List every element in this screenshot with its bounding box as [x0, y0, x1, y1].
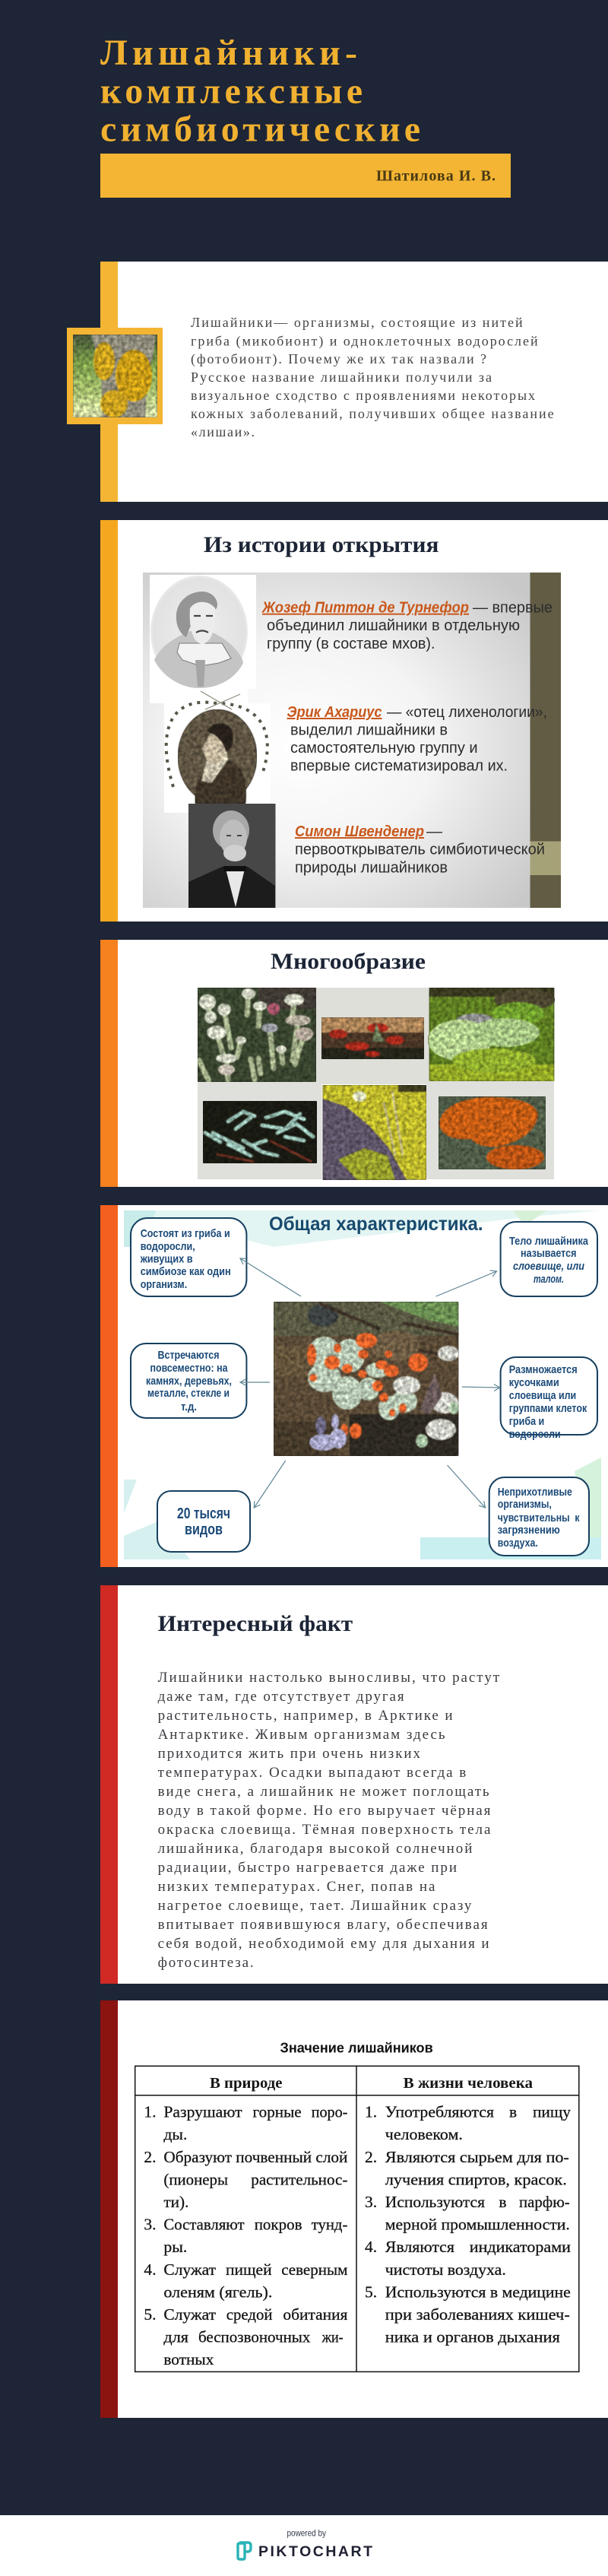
text: Schwendener: — — [426, 823, 442, 840]
column: in nature: жи- — [321, 2328, 344, 2346]
column: in nature: обитания — [283, 2305, 348, 2324]
column: in nature: Образуют почвенный слой — [163, 2148, 347, 2166]
table caption: Значение лишайников — [280, 2041, 433, 2056]
column: in nature: Служат — [163, 2260, 217, 2279]
decorative slide background — [124, 1210, 601, 1559]
callout: composition: организм. — [141, 1278, 187, 1291]
heading: history: Из истории открытия — [204, 532, 439, 557]
callout: reproduction: гриба и — [509, 1415, 544, 1428]
column: in human life: Являются сырьем для по- — [385, 2148, 569, 2166]
column: in nature: (пионеры — [163, 2170, 228, 2188]
title: комплексные — [100, 71, 363, 111]
text: Acharius: — «отец лихенологии», — [387, 704, 547, 721]
photo: cup lichens — [198, 988, 316, 1082]
column: in nature: средой — [226, 2305, 272, 2324]
callout: sensitivity: организмы, — [498, 1498, 552, 1511]
column: in nature: 3. — [144, 2216, 157, 2234]
title: симбиотические — [100, 109, 420, 150]
text: Schwendener — [295, 823, 545, 876]
footer — [0, 2515, 608, 2576]
column: in nature: Составляют — [163, 2216, 245, 2234]
column: in nature: для — [163, 2328, 188, 2346]
powered by label: powered by — [287, 2528, 326, 2539]
column: in nature: покров — [255, 2216, 302, 2234]
photo: orange crust lichen — [426, 1081, 554, 1179]
panel: general characteristics — [100, 1205, 608, 1567]
column: in human life: 5. — [365, 2283, 377, 2301]
column: in human life: пищу — [533, 2103, 571, 2121]
column: in nature: тунд- — [312, 2216, 347, 2234]
photo: red-capped lichens — [316, 988, 429, 1084]
callout: thallus: талом. — [534, 1273, 564, 1286]
author banner: Шатилова И. В. — [376, 168, 496, 185]
column: in human life: при заболеваниях кишеч- — [385, 2305, 570, 2324]
text block: fact: фотосинтеза. — [158, 1955, 254, 1971]
text: Tournefort: — впервые — [473, 600, 553, 617]
callout: habitat: т.д. — [181, 1401, 197, 1413]
column: in nature: беспозвоночных — [198, 2328, 311, 2346]
text block: fact: Антарктике. Живым организмам здесь — [158, 1727, 445, 1743]
text block: definition: визуальное сходство с проявлениями некоторых — [191, 388, 535, 403]
callout: sensitivity: чувствительны к — [498, 1512, 580, 1524]
column: in human life: мерной промышленности. — [385, 2216, 570, 2234]
text block: fact: низких температурах. Снег, попав на — [158, 1879, 435, 1895]
text block: fact — [158, 1670, 500, 1971]
column: in nature: Разрушают — [163, 2103, 242, 2121]
callout: thallus: слоевище, или — [513, 1260, 584, 1273]
callout: reproduction: кусочками — [509, 1376, 559, 1389]
text: Schwendener: Симон Швенденер — [295, 823, 424, 840]
callout: sensitivity: загрязнению — [498, 1524, 560, 1537]
column: in human life: Являются — [385, 2238, 454, 2256]
column: in human life: индикаторами — [470, 2238, 571, 2256]
text block: definition: «лишаи». — [191, 424, 255, 439]
text block: fact: приходится жить при очень низких — [158, 1746, 421, 1762]
callout: composition: симбиозе как один — [141, 1265, 231, 1278]
column: in nature: пищей — [226, 2260, 272, 2279]
portrait: Tournefort — [150, 575, 256, 703]
column: in human life: Используются в медицине — [385, 2283, 571, 2301]
text block: fact: виде снега, а лишайник не может поглощать — [158, 1784, 489, 1800]
text block: fact: нагретое слоевище, тает. Лишайник сразу — [158, 1898, 472, 1914]
column: in human life: в — [509, 2103, 517, 2121]
column: in human life — [365, 2103, 571, 2346]
callout: habitat: Встречаются — [158, 1349, 219, 1362]
panel: interesting fact — [100, 1585, 608, 1984]
photo grid — [198, 988, 555, 1180]
callout: sensitivity: воздуха. — [498, 1537, 538, 1550]
column: in nature: 2. — [144, 2148, 157, 2166]
text block: definition: (фотобионт). Почему же их так назвали ? — [191, 351, 486, 367]
column: in nature: поро- — [312, 2103, 347, 2121]
column: in nature: 4. — [144, 2260, 157, 2279]
callout: reproduction — [501, 1357, 597, 1441]
text: Tournefort: Жозеф Питтон де Турнефор — [261, 600, 469, 617]
callout: composition: водоросли, — [141, 1240, 195, 1253]
title: Лишайники- — [100, 33, 357, 73]
text block: fact: Лишайники настолько выносливы, что растут — [158, 1670, 500, 1686]
callout: reproduction: Размножается — [509, 1363, 578, 1376]
photo: reindeer lichen — [198, 1082, 322, 1179]
text: Acharius: выделил лишайники в — [290, 722, 448, 738]
text: Acharius: впервые систематизировал их. — [290, 758, 508, 775]
text block: fact: лишайника, благодаря высокой солнечной — [158, 1841, 472, 1857]
portrait: Schwendener — [188, 804, 275, 908]
heading: interesting fact: Интересный факт — [158, 1611, 353, 1636]
column: in human life: 4. — [365, 2238, 377, 2256]
callout: habitat: камнях, деревьях, — [146, 1375, 232, 1388]
table — [135, 2066, 579, 2371]
callout: composition — [131, 1218, 246, 1296]
column: in nature: ды. — [163, 2125, 187, 2143]
column: in nature: оленям (ягель). — [163, 2283, 272, 2301]
slide image: scientists — [143, 573, 561, 908]
arrows — [240, 1258, 500, 1508]
column: in human life: чистоты воздуха. — [385, 2260, 506, 2279]
column: in human life: Употребляются — [385, 2103, 494, 2121]
column: in human life: Используются — [385, 2193, 485, 2211]
icon: lichen on tree photo — [67, 328, 163, 424]
column: in human life: 1. — [365, 2103, 377, 2121]
column: in human life: парфю- — [519, 2193, 570, 2211]
portrait: Acharius — [164, 691, 271, 813]
text block: definition: Русское название лишайники получили за — [191, 370, 492, 385]
callout: habitat: повсеместно: на — [150, 1362, 228, 1375]
column: in nature: северным — [281, 2260, 348, 2279]
text: Schwendener: природы лишайников — [295, 859, 448, 876]
heading: diversity: Многообразие — [271, 949, 426, 974]
text block: definition: Лишайники— организмы, состоящие из нитей — [191, 315, 523, 330]
column: in nature: вотных — [163, 2350, 214, 2368]
callout: species count: видов — [185, 1521, 223, 1538]
callout: reproduction: слоевища или — [509, 1389, 576, 1402]
callout: thallus — [501, 1222, 597, 1296]
text block: fact: впитывает появившуюся влагу, обеспечивая — [158, 1917, 488, 1933]
column: in nature: 1. — [144, 2103, 157, 2121]
text block: fact: даже там, где отсутствует другая — [158, 1689, 404, 1705]
text block: fact: себя водой, необходимой ему для дыхания и — [158, 1936, 489, 1952]
column headers: В природе — [210, 2075, 283, 2092]
column: in nature — [144, 2103, 348, 2368]
column: in human life: ника и органов дыхания — [385, 2328, 560, 2346]
column headers: В жизни человека — [404, 2075, 533, 2092]
text block: fact: окраска слоевища. Тёмная поверхность тела — [158, 1822, 491, 1838]
photo: moss and purple lichen — [322, 1085, 426, 1180]
callout: reproduction: группами клеток — [509, 1402, 587, 1415]
column: in human life: в — [499, 2193, 507, 2211]
column: in human life: человеком. — [385, 2125, 463, 2143]
column: in nature: 5. — [144, 2305, 157, 2324]
column headers — [210, 2075, 533, 2092]
callout: composition: живущих в — [140, 1253, 193, 1266]
text: Acharius: самостоятельную группу и — [290, 740, 478, 757]
panel: significance of lichens — [100, 2000, 608, 2418]
title — [100, 33, 420, 150]
text block: definition — [191, 315, 554, 439]
panel: history — [100, 520, 608, 922]
column: in nature: Служат — [163, 2305, 217, 2324]
author banner — [100, 154, 511, 198]
text: Tournefort: группу (в составе мхов). — [267, 636, 435, 652]
callout: sensitivity: Неприхотливые — [498, 1486, 572, 1499]
column: in nature: ры. — [163, 2238, 187, 2256]
callout: reproduction: водоросли — [509, 1428, 561, 1441]
text: Tournefort — [261, 600, 553, 652]
callout: species count — [157, 1491, 250, 1552]
callout: thallus: Тело лишайника — [509, 1235, 589, 1248]
text block: fact: растительность, например, в Арктике и — [158, 1708, 453, 1724]
text block: definition: кожных заболеваний, получивших общее название — [191, 406, 554, 421]
text block: fact: радиации, быстро нагревается даже при — [158, 1860, 457, 1876]
callout: composition: Состоят из гриба и — [141, 1227, 230, 1240]
text: Acharius — [287, 704, 547, 775]
icon: piktochart logo — [238, 2543, 251, 2559]
text block: fact: воду в такой форме. Но его выручает чёрная — [158, 1803, 491, 1819]
column: in human life: лучения спиртов, красок. — [385, 2170, 567, 2188]
text: Tournefort: объединил лишайники в отдельную — [267, 617, 520, 634]
callout: thallus: называется — [521, 1247, 576, 1260]
panel: diversity — [100, 940, 608, 1187]
column: in nature: ти). — [163, 2193, 188, 2211]
photo: green lichen — [428, 988, 555, 1081]
callout: sensitivity — [489, 1477, 589, 1556]
column: in human life: 3. — [365, 2193, 377, 2211]
panel: definition — [67, 262, 608, 502]
central lichen photo — [274, 1302, 459, 1456]
column: in nature: горные — [252, 2103, 302, 2121]
callout: habitat — [131, 1344, 246, 1418]
text block: fact: температурах. Осадки выпадают всегда в — [158, 1765, 466, 1781]
logo wordmark: PIKTOCHART — [258, 2543, 372, 2560]
column: in human life: 2. — [365, 2148, 377, 2166]
text: Schwendener: первооткрыватель симбиотической — [295, 842, 545, 858]
text block: definition: гриба (микобионт) и одноклеточных водорослей — [191, 333, 538, 350]
title: general characteristics: Общая характеристика. — [269, 1213, 483, 1235]
column: in nature: растительнос- — [251, 2170, 347, 2188]
callout: habitat: металле, стекле и — [147, 1387, 230, 1400]
callout: species count: 20 тысяч — [177, 1505, 230, 1522]
text: Acharius: Эрик Ахариус — [287, 704, 382, 721]
